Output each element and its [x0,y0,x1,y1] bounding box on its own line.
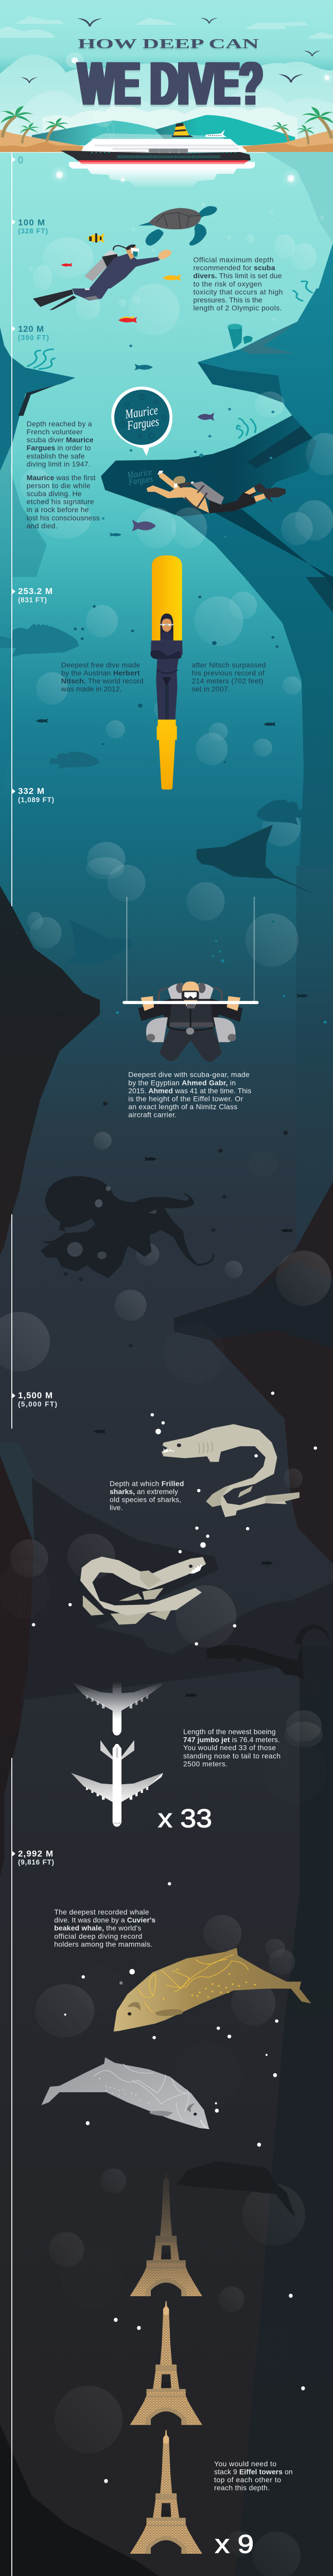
text: Ahmed Gabr: Deepest dive with scuba-gear, made [128,1071,250,1079]
particles: twilight [74,596,318,828]
bubbles: whale zone [35,1722,323,2038]
white particles [32,1392,317,2576]
text: Eiffel towers [214,2460,293,2492]
text: Ahmed Gabr [128,1071,251,1119]
sea turtle [138,206,217,246]
cloud bank, back layer [0,55,333,152]
text: beaked whale: beaked whale, the world's [54,1924,141,1932]
text: Maurice Fargues: and died. [27,521,58,530]
text: scuba limit: pressures. This is the [194,296,262,304]
ledge shadows [213,426,333,613]
left wall brown [0,1455,34,1877]
multiplier x 9: x 9 [215,2530,254,2558]
manta ray, right [197,824,317,895]
surface light orbs [50,71,333,188]
deep ridge [21,1478,333,1700]
text: scuba limit: toxicity that occurs at high [194,287,283,296]
grainy bubble: abyss [252,2325,294,2369]
text: Nitsch left: by the Austrian Herbert [61,669,140,677]
text: Maurice Fargues: Depth reached by a [27,419,92,428]
manta ray, left [61,920,132,968]
text: Nitsch left: was made in 2012, [61,685,121,693]
text: frilled sharks: sharks, an extremely [110,1487,178,1496]
signature lettering in callout: Fargues [126,415,160,433]
right cliff, shallow haze [266,152,333,243]
coral [227,324,253,350]
hills [32,115,295,145]
bubbles: dark midwater [0,1243,331,1371]
text: Nitsch right [192,660,266,693]
depth label 2992 m: 2,992 M [18,1849,53,1859]
depth label 253.2 m: (831 FT) [18,596,47,604]
seagulls [21,18,321,83]
grainy bubbles: midwater [164,1150,278,1384]
text: scuba limit: to the risk of oxygen [194,280,261,288]
bubbles: midwater [27,857,299,1149]
text: jumbo jet: standing nose to tail to reach [183,1752,281,1760]
text: Ahmed Gabr: 2015. Ahmed was 41 at the time. This [128,1087,251,1095]
bubbles: abyss [55,2386,301,2576]
scuba diver [33,244,172,310]
faded jumbo jet [71,1649,163,1736]
depth label 1500 m: 1,500 M [18,1391,52,1400]
text: jumbo jet: 747 jumbo jet is 76.4 meters. [183,1736,280,1744]
text: Ahmed Gabr: aircraft carrier. [128,1111,177,1119]
grainy bubble: frilled shark zone [0,1561,50,1618]
text: jumbo jet: You would need 33 of those [183,1743,276,1752]
text: frilled sharks: old species of sharks, [110,1495,181,1503]
Ahmed Gabr scuba diver [122,897,259,1062]
signature lettering in callout: Maurice [124,403,159,421]
signature callout bubble [111,386,172,456]
right cliff [176,243,333,866]
text: Maurice Fargues: diving limit in 1947. [27,460,91,468]
text: scuba limit [194,256,283,312]
depth label 120 m: (390 FT) [18,334,49,342]
grainy bubbles: tower zone [61,2042,242,2309]
text: Maurice Fargues: establish the safe [27,452,85,460]
text: Nitsch right: his previous record of [192,669,265,677]
left lower wall [0,1731,19,1877]
depth label 253.2 m [18,586,52,604]
cloud bank, front layer [43,104,297,152]
title line 1: HOW DEEP CAN [78,38,259,53]
rock ledge with signature [101,415,317,517]
text: Maurice Fargues: scuba diving. He [27,489,82,498]
Cuvier's beaked whale, gold [114,1948,311,2031]
grainy bubbles: whale zone [75,1735,327,2011]
depth scale line [11,152,15,2576]
rocky deep left cliff [0,886,100,1255]
depth label 100 m [18,217,48,235]
signature etched in rock [126,467,153,487]
text: frilled sharks [110,1479,184,1512]
text: jumbo jet: Length of the newest boeing [183,1727,276,1736]
text: jumbo jet: 2500 meters. [183,1759,227,1768]
sky [0,0,333,152]
text: Maurice Fargues: Maurice was the first [27,473,96,482]
ship reflection [69,162,255,187]
particles: dark water [63,1195,226,1347]
text: Ahmed Gabr: by the Egyptian Ahmed Gabr, in [128,1078,236,1087]
depth label 0: 0 [18,155,23,165]
depth label 2992 m: (9,816 FT) [18,1858,54,1866]
text: Maurice Fargues: French volunteer [27,428,83,436]
deep right water band [296,866,333,1251]
depth label 332 m [18,786,54,804]
text: scuba limit: divers. This limit is set due [194,272,282,280]
text: Eiffel towers: stack 9 Eiffel towers on [214,2468,293,2476]
seaweed [28,281,312,438]
text: Maurice Fargues: Fargues in order to [27,444,91,452]
palm trees [0,106,333,144]
blue wall band [0,1443,72,1555]
freediver's fin [157,720,177,789]
signature etched in rock: Maurice [126,467,152,480]
depth label 2992 m [18,1849,54,1866]
cruise ship [61,123,251,164]
cliff facets [198,322,297,402]
signature etched in rock: Fargues [128,473,153,487]
text: frilled sharks: Depth at which Frilled [110,1479,184,1487]
freediver's yellow rope sled [152,555,182,640]
depth label 120 m [18,324,49,342]
text: Maurice Fargues: in a rock before he [27,505,89,514]
text: Ahmed Gabr: an exact length of a Nimitz Class [128,1103,237,1111]
multiplier x 33: x 33 [158,1804,212,1833]
depth label 100 m: (328 FT) [18,227,48,235]
left cliff haze [0,442,47,791]
signature lettering in callout [124,403,160,433]
depth label 332 m: (1,089 FT) [18,796,54,804]
shadow eel [206,1625,330,1680]
Eiffel tower [130,2430,202,2554]
text: scuba limit: recommended for scuba [194,264,275,272]
depth label 332 m: 332 M [18,786,44,796]
depth label 120 m: 120 M [18,324,44,334]
title line 1: HOW DEEP CAN [78,36,259,52]
text: Ahmed Gabr: is the height of the Eiffel tower. Or [128,1094,243,1103]
Eiffel tower [130,2301,202,2425]
text: Eiffel towers: top of each other to [214,2476,281,2484]
text: beaked whale: holders among the mammals. [54,1940,152,1948]
Herbert Nitsch freediver [150,614,183,720]
deep right rock [174,1182,333,1564]
text: Maurice Fargues: person to die while [27,481,91,489]
reef fish [61,233,214,536]
depth label 100 m: 100 M [18,217,45,228]
bubbles: reef [20,284,333,548]
text: beaked whale: The deepest recorded whale [54,1908,149,1916]
faded Eiffel tower [130,2172,202,2296]
cloud bank, middle layer [0,88,333,152]
text: Nitsch left: Deepest free dive made [61,660,141,669]
text: Nitsch left: Nitsch. The world record [61,677,144,685]
text: jumbo jet [183,1727,281,1768]
Cuvier's beaked whale, silver [41,2057,209,2129]
distant clouds [0,16,333,39]
grouper silhouettes [0,623,305,825]
frilled shark, upper [162,1424,300,1517]
particles: reef [102,345,274,538]
text: beaked whale: official deep diving record [54,1932,142,1940]
bubbles: frilled shark zone [10,1468,322,1741]
lens flare [66,53,114,140]
text: Nitsch right: set in 2007. [192,685,230,693]
text: Nitsch right: after Nitsch surpassed [192,660,266,669]
frilled shark, lower [80,1556,206,1625]
shadow whale [176,2161,295,2217]
abyssal left rock [0,2424,176,2576]
beaches [0,130,333,152]
octopus silhouette [41,1177,214,1277]
text: scuba limit: length of 2 Olympic pools. [194,304,282,312]
text: Maurice Fargues: etched his signature [27,498,94,506]
text: Nitsch right: 214 meters (702 feet) [192,677,264,685]
text: Maurice Fargues: lost his consciousness [27,514,100,522]
small dark fish [36,719,308,1697]
text: Eiffel towers: reach this depth. [214,2484,270,2492]
text: Maurice Fargues [27,419,100,530]
text: Maurice Fargues: scuba diver Maurice [27,436,94,444]
bubbles: twilight [36,592,302,875]
deep right rock facet [174,1260,333,1349]
jumbo jet [71,1740,163,1827]
depth label 253.2 m: 253.2 M [18,586,52,596]
left cliff [0,327,75,471]
text: beaked whale [54,1908,155,1948]
particles: midwater [103,876,327,1153]
depth label 1500 m [18,1391,57,1408]
bubbles: shallow [29,203,324,291]
right deep band [198,1647,333,2576]
text: Eiffel towers: You would need to [214,2460,276,2468]
text: frilled sharks: live. [110,1503,123,1512]
Maurice Fargues diver [147,471,286,513]
depth label 1500 m: (5,000 FT) [18,1400,57,1408]
bubbles: tower zone [49,2168,305,2312]
text: Nitsch left [61,660,144,693]
text: scuba limit: Official maximum depth [194,256,274,264]
left cliff facet [18,384,57,416]
text: beaked whale: dive. It was done by a Cuvier's [54,1916,155,1924]
title line 1 [78,36,259,53]
